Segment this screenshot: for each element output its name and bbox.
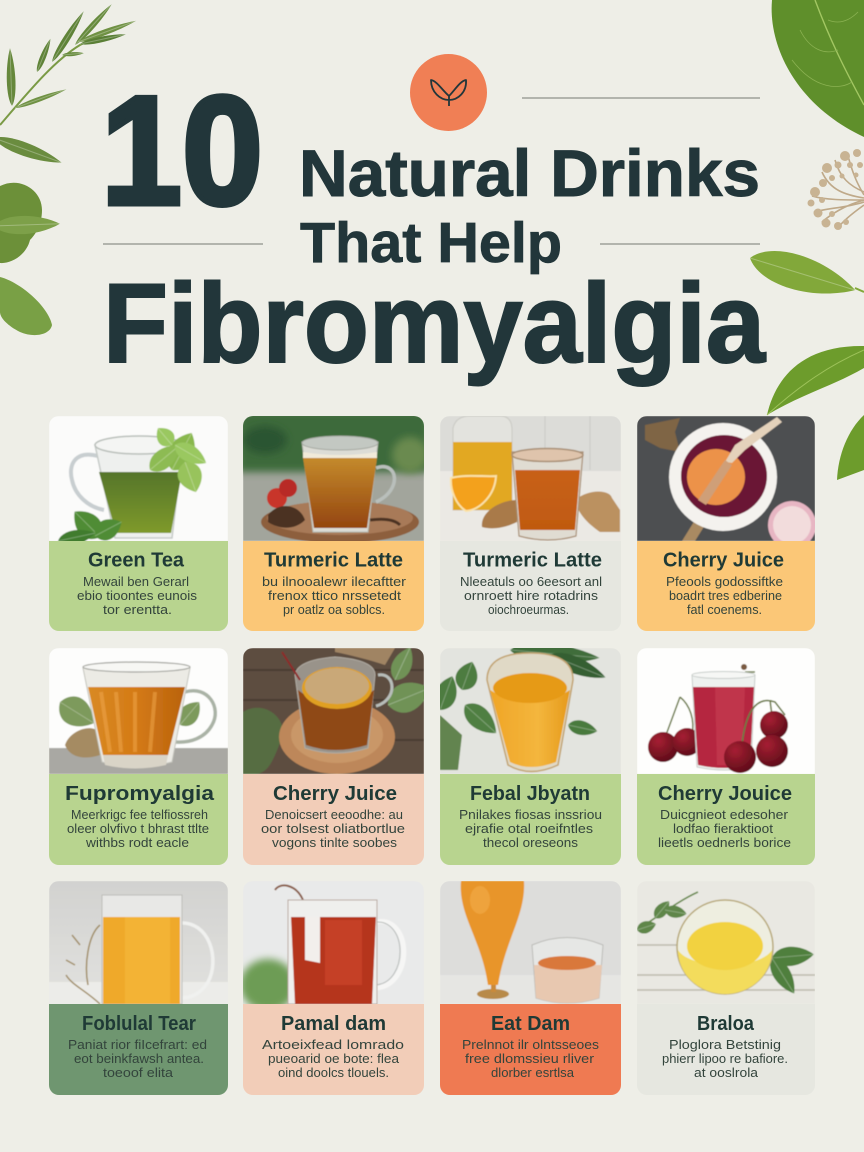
card 5: Fupromyalgia: withbs rodt eacle bbox=[85, 836, 189, 850]
title: Fibromyalgia bbox=[103, 261, 766, 386]
title: 10 bbox=[101, 64, 263, 237]
card 3: Turmeric Latte: Nleeatuls oo 6eesort anl bbox=[460, 575, 602, 589]
card 4: Cherry Juice: Pfeools godossiftke bbox=[666, 575, 783, 589]
card 11: Eat Dam: dlorber esrtlsa bbox=[491, 1066, 574, 1080]
card 4: Cherry Juice: fatl coenems. bbox=[687, 603, 762, 617]
card 2: Turmeric Latte: frenox ttico nrssetedt bbox=[268, 589, 402, 603]
card 9: Foblulal Tear: Foblulal Tear bbox=[82, 1013, 196, 1035]
photo: honey pour and salt glass bbox=[440, 881, 621, 1004]
photo: golden juice glass with leaves bbox=[440, 648, 620, 774]
top-right large leaf bbox=[772, 0, 864, 137]
photo: turmeric latte bbox=[243, 416, 424, 541]
card 6: Cherry Juice bbox=[243, 643, 435, 865]
card 10: Pamal dam: oind doolcs tlouels. bbox=[278, 1066, 389, 1080]
card 6: Cherry Juice: oor tolsest oliatbortlue bbox=[261, 822, 405, 836]
card 8: Cherry Jouice: lieetls oednerls borice bbox=[658, 836, 791, 850]
card 12: Braloa: at ooslrola bbox=[694, 1066, 758, 1080]
card 4: Cherry Juice: boadrt tres edberine bbox=[669, 589, 782, 603]
card 6: Cherry Juice: vogons tinlte soobes bbox=[272, 836, 397, 850]
card 4: Cherry Juice: Cherry Juice bbox=[663, 550, 784, 572]
card 8: Cherry Jouice: Cherry Jouice bbox=[658, 783, 792, 805]
card 9: Foblulal Tear bbox=[49, 881, 228, 1095]
card 8: Cherry Jouice: Duicgnieot edesoher bbox=[660, 808, 788, 822]
photo: cherry juice and cherries bbox=[637, 648, 815, 774]
card 12: Braloa: Braloa bbox=[697, 1013, 755, 1035]
card 12: Braloa: phierr lipoo re bafiore. bbox=[662, 1052, 788, 1066]
photo: tea with lemon on saucer bbox=[243, 643, 435, 774]
card 8: Cherry Jouice bbox=[637, 648, 815, 865]
card 12: Braloa: Ploglora Betstinig bbox=[669, 1038, 781, 1052]
dried flower sprig bbox=[808, 149, 864, 230]
card 2: Turmeric Latte: Turmeric Latte bbox=[264, 550, 403, 572]
card 5: Fupromyalgia: Meerkrigc fee telfiossreh bbox=[71, 808, 208, 822]
card 12: Braloa bbox=[637, 890, 815, 1077]
photo: ginger tea and orange bbox=[440, 416, 621, 541]
card 2: Turmeric Latte bbox=[238, 410, 429, 631]
card 3: Turmeric Latte: oiochroeurmas. bbox=[488, 603, 569, 617]
card 4: Cherry Juice bbox=[637, 416, 816, 631]
card 6: Cherry Juice: Denoicsert eeoodhe: au bbox=[265, 808, 403, 822]
card 8: Cherry Jouice: lodfao fieraktioot bbox=[673, 822, 774, 836]
card 11: Eat Dam: Prelnnot ilr olntsseoes bbox=[462, 1038, 599, 1052]
title: Natural Drinks bbox=[299, 136, 760, 210]
top-left herb decoration bbox=[0, 2, 137, 335]
title: That Help bbox=[300, 211, 562, 275]
card 5: Fupromyalgia: oleer olvfivo t bhrast ttlte bbox=[67, 822, 209, 836]
card 7: Febal Jbyatn: ejrafie otal roeifntles bbox=[465, 822, 593, 836]
card 2: Turmeric Latte: bu ilnooalewr ilecaftter bbox=[262, 575, 406, 589]
card 10: Pamal dam: Pamal dam bbox=[281, 1013, 386, 1035]
card 9: Foblulal Tear: toeoof elita bbox=[103, 1066, 173, 1080]
card 7: Febal Jbyatn bbox=[430, 640, 621, 865]
card 2: Turmeric Latte: pr oatlz oa soblcs. bbox=[283, 603, 385, 617]
card 3: Turmeric Latte bbox=[440, 416, 621, 631]
orange circle icon bbox=[410, 54, 487, 131]
title rules bbox=[103, 98, 760, 244]
card 7: Febal Jbyatn: thecol oreseons bbox=[483, 836, 578, 850]
card 11: Eat Dam bbox=[440, 881, 621, 1095]
card 9: Foblulal Tear: Paniat rior fiIcefrart: ed bbox=[68, 1038, 207, 1052]
card 11: Eat Dam: Eat Dam bbox=[491, 1013, 570, 1035]
card 1: Green Tea: ebio tioontes eunois bbox=[77, 589, 197, 603]
photo: orange juice mug bbox=[49, 881, 228, 1004]
card 10: Pamal dam: Artoeixfead lomrado bbox=[262, 1038, 404, 1052]
card 6: Cherry Juice: Cherry Juice bbox=[273, 783, 397, 805]
card 5: Fupromyalgia: Fupromyalgia bbox=[65, 783, 215, 805]
card 7: Febal Jbyatn: Febal Jbyatn bbox=[470, 783, 590, 805]
card 11: Eat Dam: free dlomssieu rliver bbox=[465, 1052, 594, 1066]
card 3: Turmeric Latte: ornroett hire rotadrins bbox=[464, 589, 598, 603]
right mid leaves bbox=[745, 241, 864, 480]
photo: bowl of cherry juice bbox=[637, 416, 816, 549]
title bbox=[101, 64, 766, 386]
card 10: Pamal dam bbox=[240, 881, 424, 1095]
card 10: Pamal dam: pueoarid oe bote: flea bbox=[268, 1052, 399, 1066]
card 7: Febal Jbyatn: Pnilakes fiosas inssriou bbox=[459, 808, 602, 822]
card 1: Green Tea: Mewail ben Gerarl bbox=[83, 575, 189, 589]
card 1: Green Tea: tor erentta. bbox=[103, 603, 172, 617]
card 1: Green Tea: Green Tea bbox=[88, 550, 185, 572]
photo: red tea mug bbox=[243, 884, 406, 1004]
card 9: Foblulal Tear: eot beinkfawsh antea. bbox=[74, 1052, 204, 1066]
photo: green tea bbox=[49, 416, 228, 548]
card 3: Turmeric Latte: Turmeric Latte bbox=[463, 550, 602, 572]
card 5: Fupromyalgia bbox=[49, 648, 228, 865]
card 1: Green Tea bbox=[49, 416, 228, 631]
photo: lemon drink in glass bowl bbox=[637, 890, 815, 996]
photo: amber tea mug bbox=[49, 648, 228, 774]
